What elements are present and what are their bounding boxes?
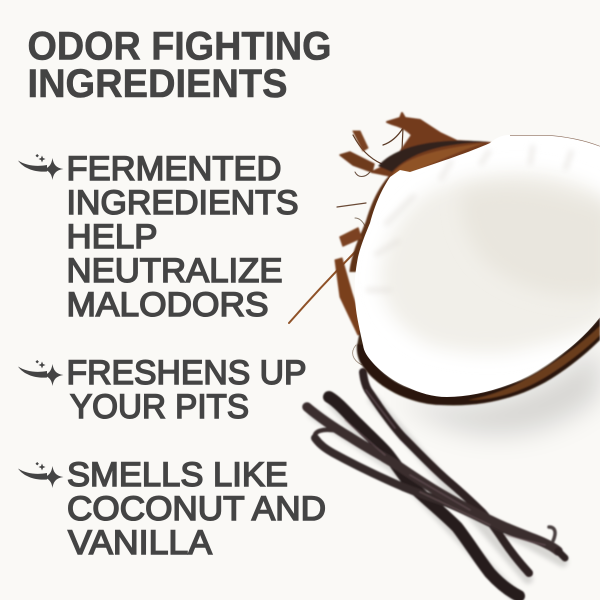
text block: fermented ingredients: FERMENTED	[66, 150, 282, 188]
title: ODOR FIGHTING	[28, 24, 332, 68]
text block: fermented ingredients: INGREDIENTS	[66, 184, 298, 222]
text block: smells like: SMELLS LIKE	[67, 456, 288, 494]
text block: freshens up	[66, 354, 306, 426]
icon: vanilla pods	[307, 372, 565, 599]
husk branch	[340, 152, 374, 172]
title: INGREDIENTS	[28, 62, 288, 106]
husk upper band	[372, 113, 493, 176]
husk left band	[354, 168, 410, 272]
husk rim	[357, 317, 600, 405]
text block: fermented ingredients: MALODORS	[66, 286, 268, 324]
text block: smells like	[67, 456, 326, 562]
text block: fermented ingredients	[66, 150, 298, 324]
icon: sparkle 2	[18, 360, 64, 386]
text block: smells like: VANILLA	[68, 524, 212, 562]
text block: fermented ingredients: NEUTRALIZE	[66, 252, 282, 290]
icon: coconut	[289, 113, 600, 434]
title	[28, 24, 332, 106]
coconut flesh	[355, 135, 600, 397]
husk side tufts	[340, 228, 361, 246]
icon: sparkle 1	[18, 154, 64, 180]
text block: freshens up: YOUR PITS	[70, 388, 249, 426]
icon: sparkle 3	[18, 462, 64, 488]
husk inner light	[392, 143, 485, 176]
text block: freshens up: FRESHENS UP	[66, 354, 306, 392]
text block: fermented ingredients: HELP	[66, 218, 158, 256]
text block: smells like: COCONUT AND	[67, 490, 326, 528]
